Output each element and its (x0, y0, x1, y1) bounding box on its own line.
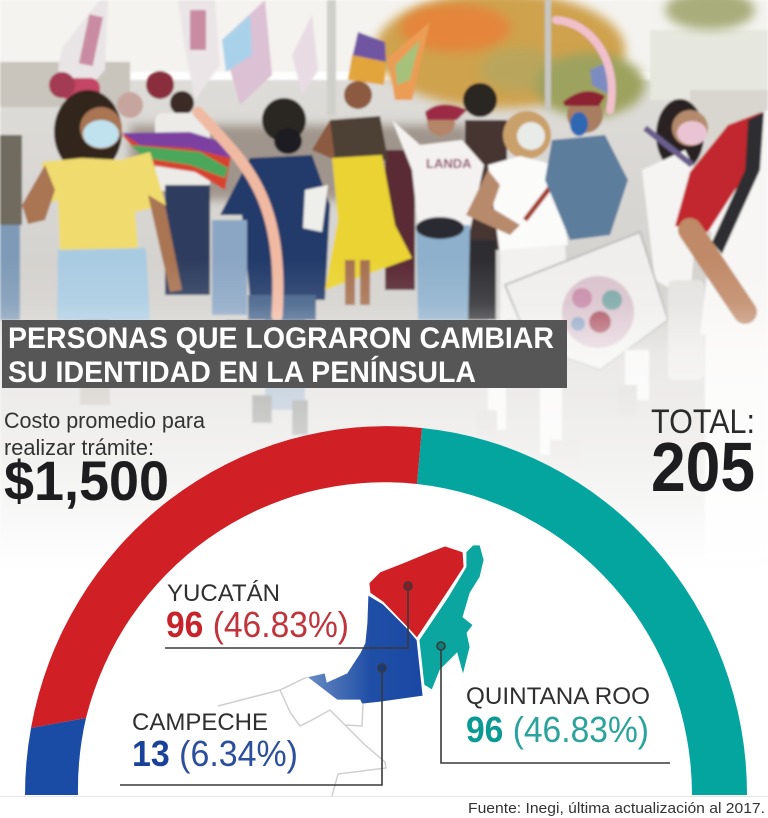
label: Quintana Roo: 96 (46.83%) (466, 709, 649, 750)
label: Campeche: 13 (6.34%) (132, 733, 298, 774)
title: PERSONAS QUE LOGRARON CAMBIAR (8, 322, 554, 355)
leader: Yucatán (165, 582, 412, 648)
person: far left man (0, 135, 22, 225)
person: boy in blue (262, 98, 306, 142)
semicircle chart (25, 426, 747, 795)
arc: Quintana Roo segment (417, 428, 747, 795)
label: Campeche (132, 709, 298, 774)
state: Campeche (307, 595, 423, 704)
chart interior (65, 475, 705, 795)
flags (58, 0, 108, 100)
label: Yucatán: YUCATÁN (167, 580, 280, 607)
label: Yucatán: 96 (46.83%) (166, 604, 349, 645)
state: Yucatán (369, 546, 464, 638)
background photo: march: LANDA (426, 156, 472, 171)
base line (0, 796, 768, 797)
state: Quintana Roo (419, 545, 484, 690)
person: woman with drumstick (503, 111, 551, 159)
cost callout (4, 408, 206, 512)
arc: Yucatán segment (31, 426, 422, 728)
cost callout: $1,500 (4, 449, 169, 512)
cost callout: realizar trámite: (4, 435, 154, 460)
map of the peninsula (218, 545, 484, 796)
person: yellow dress (344, 81, 372, 109)
label: Quintana Roo (466, 683, 650, 750)
title (2, 320, 567, 389)
leader: Campeche (120, 664, 386, 785)
far crowd (130, 125, 470, 200)
title: SU IDENTIDAD EN LA PENÍNSULA (8, 355, 476, 389)
rainbow flag (122, 132, 232, 190)
arc: Campeche segment (25, 718, 86, 795)
person: right man in red (676, 110, 768, 335)
person: left woman yellow (54, 90, 122, 174)
legs below (80, 320, 110, 405)
source: Fuente: Inegi, última actualización al 2017. (468, 800, 765, 817)
label: Yucatán (166, 580, 349, 645)
neighbouring states outline (218, 677, 386, 796)
total callout: TOTAL: (651, 403, 755, 441)
label: Quintana Roo: QUINTANA ROO (466, 683, 650, 710)
person: LANDA woman (427, 108, 455, 136)
balloon (198, 112, 278, 316)
label: Campeche: CAMPECHE (132, 709, 268, 736)
total callout (651, 403, 755, 506)
person: woman pink mask (656, 99, 704, 171)
leader: Quintana Roo (437, 642, 670, 763)
person: man in white shirt behind (170, 91, 194, 115)
total callout: 205 (651, 428, 755, 506)
person: man in blue polo (567, 97, 603, 133)
cost callout: Costo promedio para (4, 408, 206, 433)
drum (505, 232, 668, 370)
